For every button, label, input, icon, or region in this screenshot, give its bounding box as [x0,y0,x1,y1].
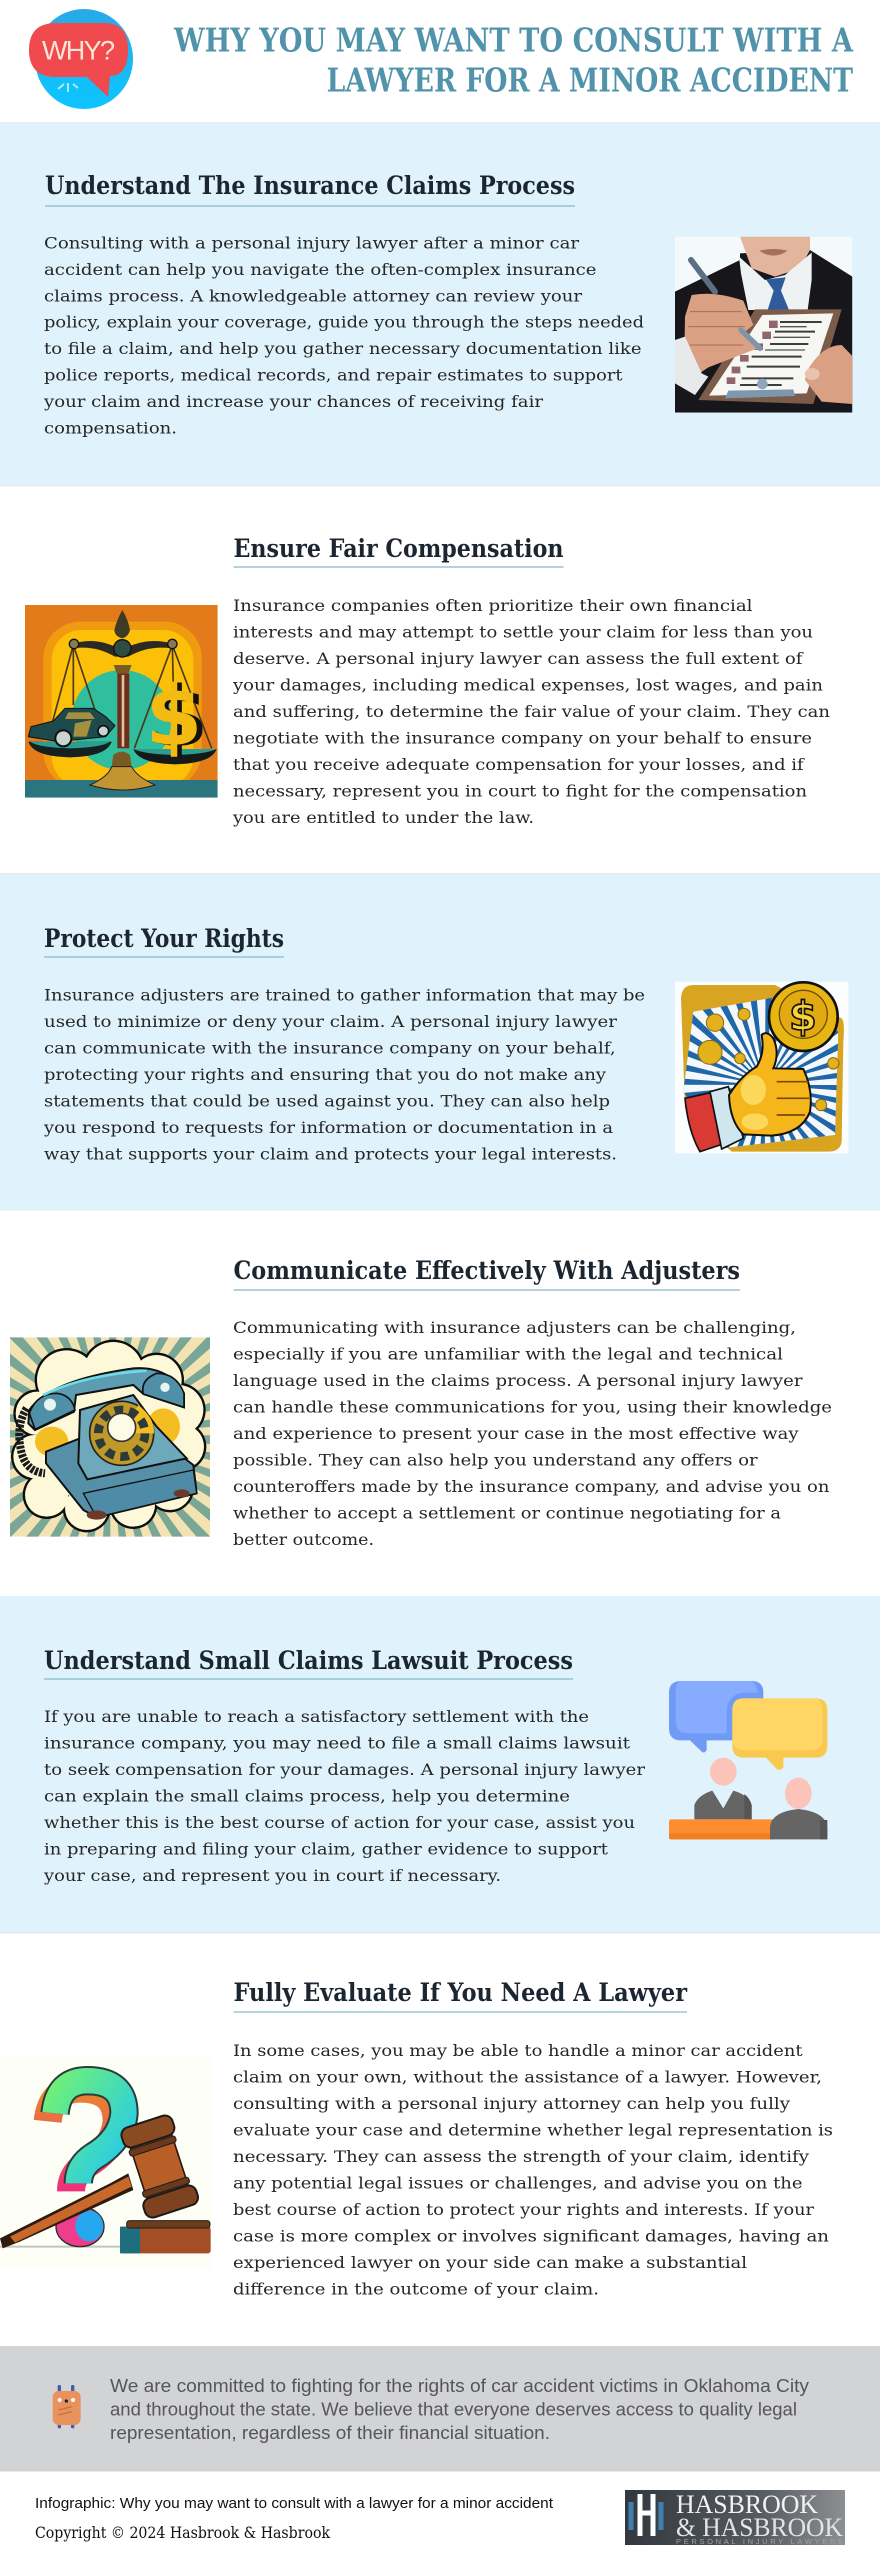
text block: fully evaluate: evaluate your case and determine whether legal representation is [233,2120,833,2140]
icon: why speech bubble: WHY? [42,36,115,66]
text block: communicate effectively: counteroffers made by the insurance company, and advise you on [233,1477,829,1496]
text block: protect your rights: protecting your rights and ensuring that you do not make any [44,1065,606,1084]
panel: understand the insurance claims process [0,122,880,485]
icon: scales with car and dollar [25,605,218,798]
text block: protect your rights: Insurance adjusters are trained to gather information that may be [44,985,645,1004]
logo: hasbrook and hasbrook: & HASBROOK [676,2513,843,2542]
text block: small claims: insurance company, you may need to file a small claims lawsuit [44,1734,631,1752]
text block: fair compensation: deserve. A personal injury lawyer can assess the full extent of [233,649,804,668]
text block: small claims [43,1707,645,1885]
text block: fully evaluate: claim on your own, without the assistance of a lawyer. However, [233,2068,822,2086]
text block: communicate effectively: language used in the claims process. A personal injury lawyer [233,1371,803,1390]
text block: fair compensation: you are entitled to under the law. [232,808,534,827]
heading: small claims: Understand Small Claims Lawsuit Process [44,1646,573,1675]
icon: scales with car and dollar: $ [148,669,208,766]
text block: communicate effectively: possible. They can also help you understand any offers or [233,1450,758,1470]
text block: fully evaluate: best course of action to protect your rights and interests. If your [233,2200,814,2219]
icon: rotary telephone [10,1337,210,1537]
panel: protect your rights [0,873,880,1209]
text block: insurance claims: compensation. [44,418,177,437]
text block: protect your rights: way that supports your claim and protects your legal interests. [44,1144,617,1163]
text block: communicate effectively [233,1318,832,1549]
banner text: representation, regardless of their financial situation. [110,2422,550,2443]
text block: insurance claims: your claim and increase your chances of receiving fair [43,392,543,411]
text block: fully evaluate: necessary. They can assess the strength of your claim, identify [233,2147,809,2166]
panel: commitment banner [0,2346,880,2472]
footer caption: Infographic: Why you may want to consult with a lawyer for a minor accident [35,2495,554,2512]
text block: communicate effectively: and experience to present your case in the most effective way [233,1424,798,1443]
text block: insurance claims: policy, explain your coverage, guide you through the steps needed [44,313,644,332]
text block: communicate effectively: especially if you are unfamiliar with the legal and technical [233,1344,783,1364]
text block: fair compensation: negotiate with the insurance company on your behalf to ensure [233,728,812,748]
icon: question mark and gavel [0,2056,211,2269]
text block: fair compensation: that you receive adequate compensation for your losses, and if [233,755,805,774]
footer [0,2472,880,2560]
icon: why speech bubble [29,9,133,109]
copyright: Copyright © 2024 Hasbrook & Hasbrook [35,2524,331,2542]
text block: insurance claims: claims process. A knowledgeable attorney can review your [44,286,582,305]
text block: fair compensation: and suffering, to determine the fair value of your claim. They can [233,702,830,721]
text block: communicate effectively: can handle these communications for you, using their knowledge [233,1398,832,1416]
panel: understand small claims lawsuit process [0,1596,880,1932]
text block: small claims: your case, and represent you in court if necessary. [43,1866,501,1885]
text block: fully evaluate: any potential legal issues or challenges, and advise you on the [233,2174,802,2192]
text block: protect your rights [43,985,645,1163]
text block: insurance claims [43,234,644,437]
text block: fully evaluate: In some cases, you may be able to handle a minor car accident [233,2041,803,2060]
header [0,0,880,122]
text block: fair compensation: Insurance companies often prioritize their own financial [233,596,752,615]
icon: scales with car and dollar: $ [146,667,202,764]
text block: small claims: whether this is the best course of action for your case, assist you [44,1813,635,1832]
text block: communicate effectively: whether to accept a settlement or continue negotiating for a [233,1504,782,1522]
icon: thumbs up with coin [675,981,848,1154]
text block: protect your rights: you respond to requests for information or documentation in a [43,1118,614,1137]
heading: fully evaluate: Fully Evaluate If You Need A Lawyer [234,1978,688,2007]
text block: insurance claims: accident can help you navigate the often-complex insurance [44,260,596,279]
text block: fully evaluate: consulting with a personal injury attorney can help you fully [233,2094,790,2113]
text block: small claims: to seek compensation for your damages. A personal injury lawyer [44,1760,645,1779]
panel: ensure fair compensation [0,485,880,826]
icon: bear mascot [53,2385,81,2428]
text block: communicate effectively: better outcome. [233,1530,374,1549]
text block: insurance claims: to file a claim, and help you gather necessary documentation like [44,339,642,358]
logo: hasbrook and hasbrook: PERSONAL INJURY LAWYERS [676,2537,843,2546]
heading: fair compensation: Ensure Fair Compensation [234,534,564,563]
text block: fair compensation: your damages, including medical expenses, lost wages, and pain [232,676,823,694]
panel: communicate effectively with adjusters [0,1209,880,1545]
text block: protect your rights: statements that could be used against you. They can also help [44,1091,610,1110]
icon: thumbs up with coin: $ [789,994,817,1040]
heading: insurance claims: Understand The Insurance Claims Process [45,171,575,200]
text block: fair compensation [232,596,830,827]
text block: protect your rights: used to minimize or deny your claim. A personal injury lawyer [44,1012,617,1031]
heading: protect your rights: Protect Your Rights [44,924,284,953]
text block: fully evaluate: difference in the outcome of your claim. [233,2280,599,2298]
text block: fully evaluate: case is more complex or involves significant damages, having an [233,2226,829,2246]
panel: fully evaluate if you need a lawyer [0,1932,880,2346]
text block: insurance claims: police reports, medical records, and repair estimates to support [44,366,623,384]
banner text: We are committed to fighting for the rights of car accident victims in Oklahoma City [110,2375,810,2396]
title [173,21,853,100]
text block: fully evaluate [233,2041,833,2298]
text block: insurance claims: Consulting with a personal injury lawyer after a minor car [44,234,579,252]
text block: fully evaluate: experienced lawyer on your side can make a substantial [233,2253,747,2272]
banner text: and throughout the state. We believe that everyone deserves access to quality legal [110,2398,797,2420]
text block: protect your rights: can communicate with the insurance company on your behalf, [44,1038,616,1057]
text block: small claims: in preparing and filing your claim, gather evidence to support [44,1840,609,1858]
icon: people talking [669,1681,827,1839]
text block: communicate effectively: Communicating with insurance adjusters can be challenging, [233,1318,796,1337]
logo: hasbrook and hasbrook: HASBROOK [676,2490,818,2519]
heading: communicate effectively: Communicate Effectively With Adjusters [234,1256,740,1285]
icon: lawyer with clipboard [675,237,852,413]
banner text [110,2375,810,2443]
text block: fair compensation: interests and may attempt to settle your claim for less than you [233,622,813,642]
logo: hasbrook and hasbrook [625,2490,845,2546]
text block: small claims: can explain the small claims process, help you determine [44,1786,570,1806]
text block: fair compensation: necessary, represent you in court to fight for the compensation [233,782,807,800]
text block: small claims: If you are unable to reach a satisfactory settlement with the [44,1707,589,1726]
